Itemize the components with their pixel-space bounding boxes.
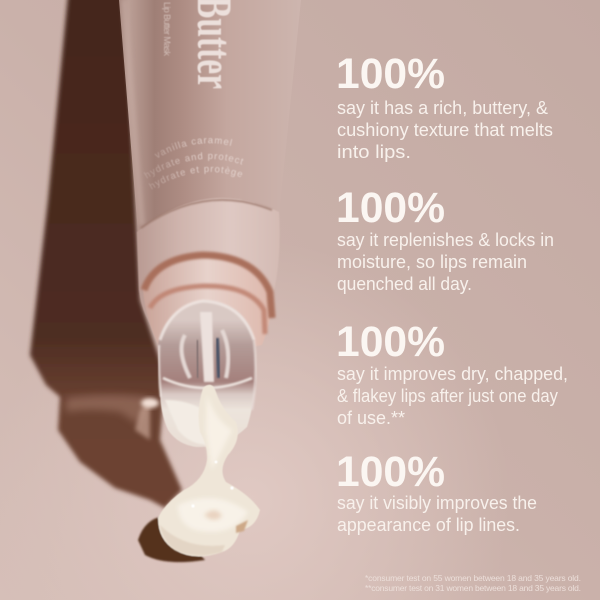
stat block 3: say it improves dry, chapped, — [337, 363, 568, 384]
tube neck — [143, 252, 272, 362]
clear applicator tip — [158, 300, 256, 447]
stat block 2 — [336, 184, 554, 294]
curved tube copy: hydrate et protège — [149, 166, 242, 189]
stat block 2: quenched all day. — [337, 273, 472, 294]
stat block 4: say it visibly improves the — [337, 492, 537, 513]
stat block 2: 100% — [336, 184, 445, 232]
stat block 3: 100% — [336, 318, 445, 366]
stat block 2: say it replenishes & locks in — [337, 229, 554, 250]
stat block 3 — [336, 318, 568, 428]
stat block 1 — [336, 50, 553, 162]
curved tube copy — [144, 138, 244, 189]
curved tube copy: hydrate and protect — [144, 152, 244, 178]
stat block 1: cushiony texture that melts — [337, 119, 553, 140]
brand name on tube: Butter — [187, 0, 243, 89]
stat block 2: moisture, so lips remain — [337, 251, 527, 272]
stat block 1: say it has a rich, buttery, & — [337, 97, 549, 118]
footnotes — [365, 573, 581, 593]
cream ribbon and dollop — [138, 385, 260, 562]
footnotes: **consumer test on 31 women between 18 and 35 years old. — [365, 583, 581, 593]
stat block 3: of use.** — [337, 407, 405, 428]
stat block 1: into lips. — [337, 141, 411, 162]
stat block 3: & flakey lips after just one day — [337, 385, 559, 406]
tube body — [119, 0, 244, 230]
curved tube copy: vanilla caramel — [154, 138, 232, 158]
stat block 4: appearance of lip lines. — [337, 514, 520, 535]
tube collar — [137, 198, 280, 335]
stat block 4: 100% — [336, 448, 445, 496]
small product line: Lip Butter Mask — [162, 2, 172, 56]
stat block 1: 100% — [336, 50, 445, 98]
tube cast shadow — [30, 0, 182, 508]
footnotes: *consumer test on 55 women between 18 and 35 years old. — [365, 573, 581, 583]
stat block 4 — [336, 448, 537, 535]
